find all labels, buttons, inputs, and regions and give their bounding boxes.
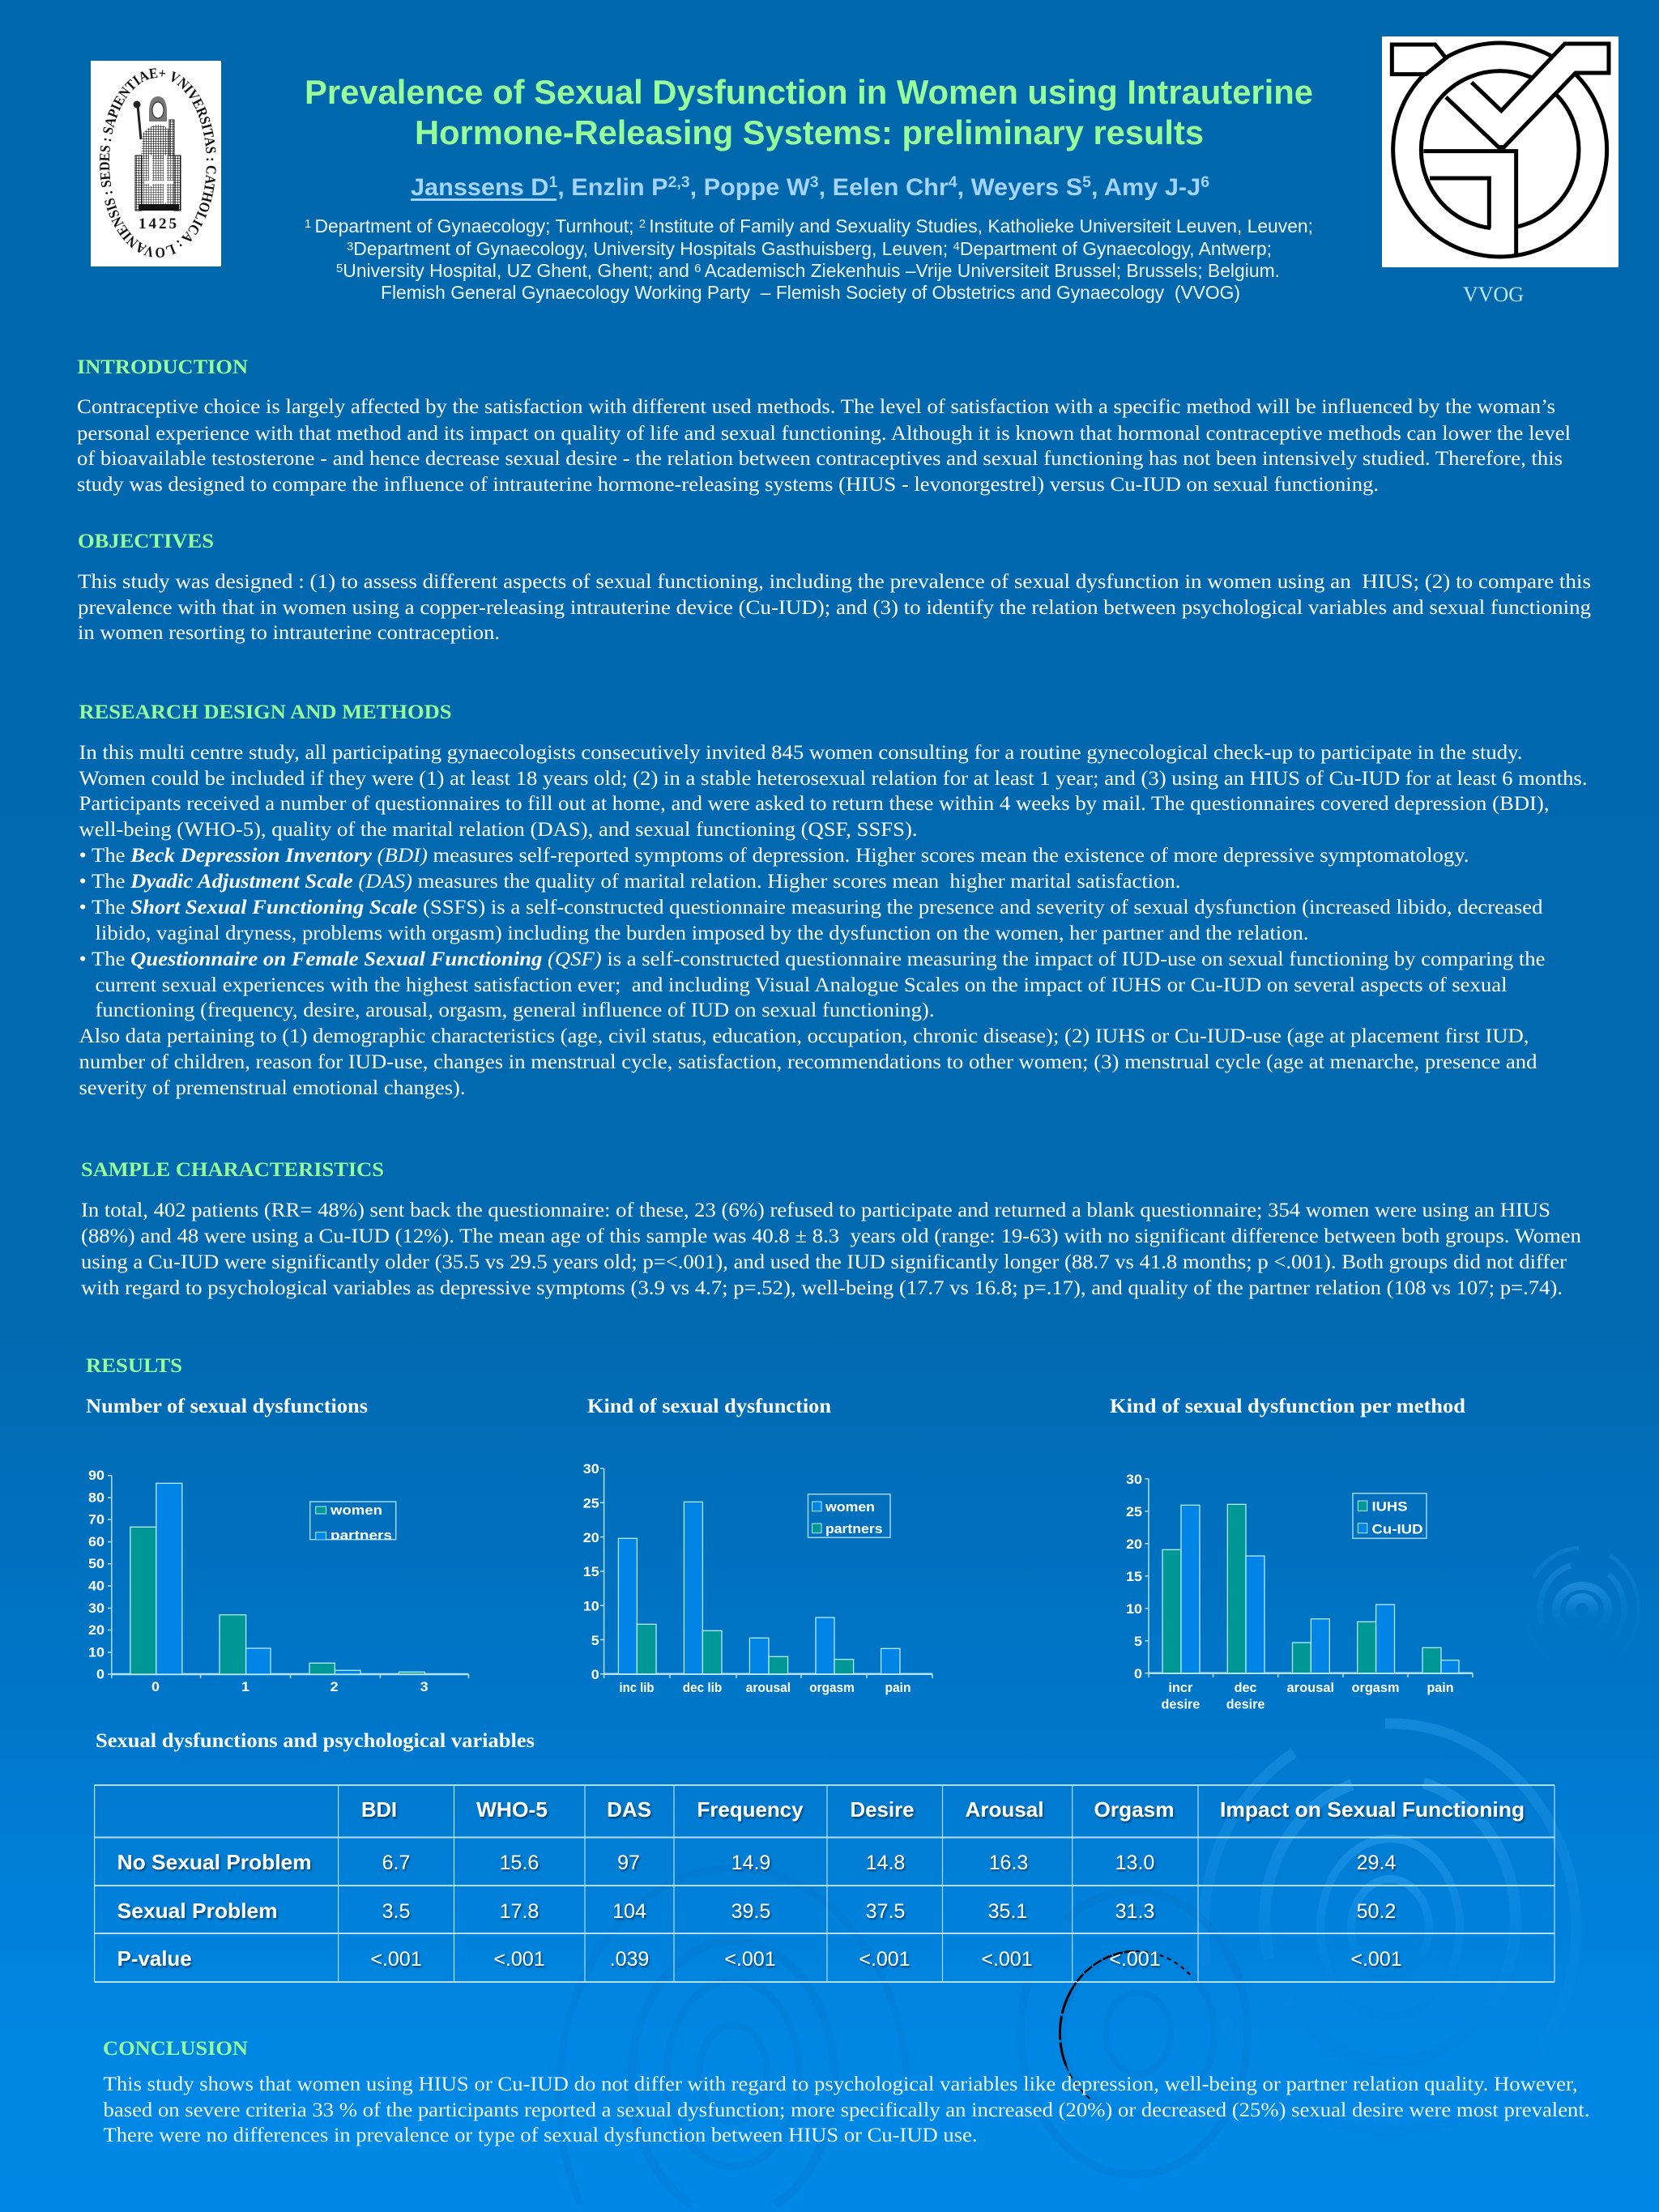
legend: partners: [331, 1528, 392, 1543]
x axis labels: incr: [1168, 1680, 1193, 1695]
y axis labels: 25: [1126, 1504, 1142, 1519]
affiliations: 1: [305, 217, 314, 231]
text block: conclusion: There were no differences in prevalence or type of sexual dysfunction between HIUS or Cu-IUD use.: [104, 2125, 977, 2146]
x axis labels: dec lib: [683, 1680, 722, 1695]
legend: [808, 1494, 890, 1537]
text block: introduction: of bioavailable testosterone - and hence decrease sexual desire - the relation between contraceptives and sexual functioning has not been intensively studied. Therefore, this: [77, 448, 1563, 470]
table row: no sexual problem: 14.9: [731, 1852, 770, 1874]
y axis labels: 20: [583, 1530, 599, 1545]
table header row: BDI: [361, 1797, 397, 1822]
text block: methods: Women could be included if they were (1) at least 18 years old; (2) in a stable heterosexual relation for at least 1 year; and (3) using an HIUS of Cu-IUD for at least 6 months.: [79, 768, 1588, 790]
authors: 6: [1201, 174, 1209, 191]
y axis labels: 10: [1126, 1601, 1142, 1617]
table heading: Sexual dysfunctions and psychological variables: [96, 1730, 535, 1752]
table row: no sexual problem: 6.7: [382, 1852, 410, 1874]
table row: p-value: <.001: [859, 1948, 911, 1971]
table row: sexual problem: 50.2: [1357, 1900, 1396, 1923]
y axis labels: [88, 1468, 104, 1681]
bars: [130, 1483, 424, 1674]
table row: no sexual problem: No Sexual Problem: [117, 1850, 312, 1874]
text block: conclusion: [104, 2073, 1589, 2146]
y axis labels: 30: [1126, 1472, 1142, 1487]
legend: women: [825, 1499, 875, 1515]
y axis labels: 40: [88, 1578, 104, 1594]
legend: partners: [825, 1521, 883, 1536]
y axis labels: 80: [88, 1490, 104, 1505]
table row: p-value: <.001: [493, 1948, 545, 1971]
x axis labels: [1162, 1680, 1453, 1711]
affiliations: 3: [347, 240, 353, 254]
text block: methods: libido, vaginal dryness, problems with orgasm) including the burden imposed by the dysfunction on the women, her partner and the relation.: [96, 923, 1309, 944]
heading: results: RESULTS: [86, 1355, 182, 1377]
table row: sexual problem: 39.5: [731, 1900, 770, 1923]
authors: , Amy J-J: [1091, 174, 1201, 201]
bar chart: number of sexual dysfunctions: [88, 1468, 468, 1694]
x axis labels: orgasm: [809, 1680, 855, 1695]
table row: sexual problem: 35.1: [988, 1900, 1027, 1923]
y axis labels: 0: [96, 1667, 104, 1681]
text block: sample characteristics: using a Cu-IUD were significantly older (35.5 vs 29.5 years old; p=<.001), and used the IUD significantly longer (88.7 vs 41.8 months; p <.001). Both groups did not differ: [81, 1251, 1567, 1273]
table row: sexual problem: Sexual Problem: [117, 1899, 278, 1923]
x axis labels: 2: [331, 1679, 339, 1694]
table row: sexual problem: 17.8: [500, 1900, 539, 1923]
bar chart: kind of sexual dysfunction: [583, 1461, 932, 1695]
title: Prevalence of Sexual Dysfunction in Women using Intrauterine: [305, 73, 1313, 111]
table row: no sexual problem: 29.4: [1357, 1852, 1396, 1874]
y axis labels: 60: [88, 1534, 104, 1549]
authors: , Weyers S: [957, 174, 1082, 201]
text block: methods: Participants received a number of questionnaires to fill out at home, and were asked to return these within 4 weeks by mail. The questionnaires covered depression (BDI),: [79, 793, 1549, 815]
y axis labels: 5: [1134, 1634, 1142, 1649]
table header row: [361, 1797, 1525, 1822]
bars: [618, 1502, 900, 1674]
text block: methods: • The Short Sexual Functioning Scale (SSFS) is a self-constructed questionnaire measuring the presence and severity of sexual dysfunction (increased libido, decreased: [79, 897, 1543, 918]
x axis labels: orgasm: [1351, 1680, 1400, 1695]
text block: objectives: in women resorting to intrauterine contraception.: [78, 622, 500, 644]
text block: methods: [79, 742, 1588, 1099]
bars: [1162, 1504, 1459, 1673]
selection arc artifact: [1060, 1951, 1190, 2100]
text block: methods: well-being (WHO-5), quality of the marital relation (DAS), and sexual functioning (QSF, SSFS).: [79, 819, 917, 841]
table header row: Frequency: [697, 1797, 804, 1822]
table row: sexual problem: 3.5: [382, 1900, 410, 1923]
seal ring inscription: + VNIVERSITAS : CATHOLICA : LOVANIENSIS : SEDES : SAPIENTIAE: [100, 68, 216, 258]
x axis labels: [619, 1680, 911, 1695]
table header row: Impact on Sexual Functioning: [1220, 1797, 1525, 1822]
authors: [411, 174, 1209, 201]
text block: introduction: Contraceptive choice is largely affected by the satisfaction with different used methods. The level of satisfaction with a specific method will be influenced by the woman’s: [77, 396, 1555, 418]
y axis labels: 10: [583, 1599, 599, 1613]
x axis labels: pain: [1427, 1680, 1453, 1695]
y axis labels: [583, 1461, 599, 1682]
table row: sexual problem: 37.5: [866, 1900, 905, 1923]
text block: sample characteristics: [81, 1200, 1582, 1299]
table row: sexual problem: 104: [612, 1900, 646, 1923]
text block: objectives: This study was designed : (1) to assess different aspects of sexual functioning, including the prevalence of sexual dysfunction in women using an HIUS; (2) to compare this: [78, 571, 1591, 593]
seated figure: [133, 96, 181, 211]
text block: introduction: [77, 396, 1571, 496]
logo: VVOG: [1382, 36, 1618, 267]
bar chart: kind of sexual dysfunction per method: [1126, 1472, 1473, 1711]
text block: methods: • The Beck Depression Inventory (BDI) measures self-reported symptoms of depression. Higher scores mean the existence of more depressive symptomatology.: [79, 845, 1469, 867]
table row: no sexual problem: 97: [617, 1852, 640, 1874]
text block: methods: In this multi centre study, all participating gynaecologists consecutively invited 845 women consulting for a routine gynecological check-up to participate in the study.: [79, 742, 1523, 764]
table header row: Orgasm: [1094, 1797, 1175, 1822]
x axis labels: pain: [885, 1680, 911, 1695]
table row: no sexual problem: [117, 1850, 1396, 1874]
table row: no sexual problem: 13.0: [1115, 1852, 1154, 1874]
affiliations: Institute of Family and Sexuality Studies, Katholieke Universiteit Leuven, Leuven;: [649, 215, 1313, 237]
table header row: Arousal: [966, 1797, 1043, 1822]
legend: women: [330, 1502, 382, 1518]
table row: p-value: <.001: [724, 1948, 776, 1971]
year 1425: 1425: [139, 215, 179, 232]
x axis labels: dec: [1235, 1680, 1257, 1695]
text block: methods: • The Dyadic Adjustment Scale (DAS) measures the quality of marital relation. Higher scores mean higher marital satisfaction.: [79, 871, 1181, 893]
table row: sexual problem: [117, 1899, 1396, 1923]
affiliations: Academisch Ziekenhuis –Vrije Universiteit Brussel; Brussels; Belgium.: [705, 260, 1280, 281]
y axis labels: 20: [1126, 1536, 1142, 1552]
table row: no sexual problem: 16.3: [989, 1852, 1028, 1874]
authors: 1: [548, 174, 558, 191]
text block: conclusion: This study shows that women using HIUS or Cu-IUD do not differ with regard to psychological variables like depression, well-being or partner relation quality. However,: [104, 2073, 1578, 2095]
x axis labels: 3: [420, 1679, 429, 1694]
title: [305, 73, 1313, 151]
text block: conclusion: based on severe criteria 33 % of the participants reported a sexual dysfunction; more specifically an increased (20%) or decreased (25%) sexual desire were most prevalent.: [104, 2099, 1589, 2121]
authors: 3: [810, 174, 819, 191]
text block: methods: • The Questionnaire on Female Sexual Functioning (QSF) is a self-constructed questionnaire measuring the impact of IUD-use on sexual functioning by comparing the: [79, 948, 1546, 970]
table text: [117, 1797, 1525, 1971]
table: sexual dysfunctions and psychological variables: [95, 1785, 1555, 2100]
table header row: WHO-5: [476, 1797, 548, 1822]
x axis labels: desire: [1162, 1696, 1200, 1711]
y axis labels: 50: [88, 1556, 104, 1571]
axes: [108, 1476, 468, 1678]
y axis labels: 0: [1134, 1666, 1142, 1681]
affiliations: [305, 215, 1313, 303]
authors: , Poppe W: [690, 174, 810, 201]
axes: [600, 1468, 932, 1678]
y axis labels: 10: [88, 1644, 104, 1660]
table row: p-value: <.001: [370, 1948, 422, 1971]
section: research design and methods: [79, 701, 1588, 1099]
legend: [310, 1502, 396, 1543]
table row: p-value: .039: [610, 1948, 649, 1971]
x axis labels: 1: [241, 1679, 249, 1694]
legend: Cu-IUD: [1372, 1521, 1422, 1536]
chart heading: kind of sexual dysfunction per method: Kind of sexual dysfunction per method: [1110, 1396, 1465, 1417]
title: Hormone-Releasing Systems: preliminary results: [415, 113, 1204, 151]
legend: IUHS: [1372, 1499, 1408, 1515]
table row: p-value: <.001: [1350, 1948, 1402, 1971]
table row: no sexual problem: 15.6: [500, 1852, 539, 1874]
text block: introduction: personal experience with that method and its impact on quality of life and sexual functioning. Although it is known that hormonal contraceptive methods can lower the level: [77, 423, 1571, 445]
table row: sexual problem: 31.3: [1115, 1900, 1154, 1923]
affiliations: Department of Gynaecology, Antwerp;: [960, 238, 1272, 259]
y axis labels: 25: [583, 1495, 599, 1511]
table row: p-value: P-value: [117, 1946, 192, 1971]
text block: objectives: [78, 571, 1592, 644]
table header row: Desire: [851, 1797, 914, 1822]
affiliations: Department of Gynaecology; Turnhout;: [314, 215, 639, 237]
text block: introduction: study was designed to compare the influence of intrauterine hormone-releasing systems (HIUS - levonorgestrel) versus Cu-IUD on sexual functioning.: [77, 474, 1379, 496]
table row: p-value: [117, 1946, 1402, 1971]
y axis labels: 90: [88, 1468, 104, 1483]
text block: sample characteristics: with regard to psychological variables as depressive symptoms (3.9 vs 4.7; p=.52), well-being (17.7 vs 16.8; p=.17), and quality of the partner relation (108 vs 107; p=.74).: [81, 1277, 1563, 1299]
y axis labels: 5: [591, 1633, 599, 1648]
x axis labels: arousal: [746, 1680, 791, 1695]
y axis labels: [1126, 1472, 1142, 1681]
y axis labels: 30: [583, 1461, 599, 1477]
x axis labels: [151, 1679, 429, 1694]
affiliations: 2: [639, 217, 649, 231]
y axis labels: 0: [591, 1667, 599, 1682]
section: sample characteristics: [81, 1159, 1582, 1299]
logo: KU Leuven seal: [91, 61, 221, 266]
authors: 5: [1082, 174, 1091, 191]
table row: p-value: <.001: [1109, 1948, 1161, 1971]
x axis labels: desire: [1226, 1696, 1265, 1711]
y axis labels: 70: [88, 1511, 104, 1528]
logo caption: VVOG: [1463, 283, 1524, 306]
table row: no sexual problem: 14.8: [866, 1852, 905, 1874]
table header row: DAS: [607, 1797, 651, 1822]
chart heading: number of sexual dysfunctions: Number of sexual dysfunctions: [86, 1396, 368, 1417]
text block: objectives: prevalence with that in women using a copper-releasing intrauterine device (Cu-IUD); and (3) to identify the relation between psychological variables and sexual functioning: [78, 597, 1592, 619]
y axis labels: 30: [88, 1600, 104, 1616]
authors: 2,3: [668, 174, 690, 191]
background ripple patterns: [559, 1548, 1639, 2205]
affiliations: 4: [953, 240, 960, 254]
affiliations: Flemish General Gynaecology Working Party – Flemish Society of Obstetrics and Gynaecology (VVOG): [381, 282, 1240, 303]
authors: , Eelen Chr: [819, 174, 949, 201]
text block: methods: severity of premenstrual emotional changes).: [79, 1077, 465, 1099]
heading: introduction: INTRODUCTION: [77, 356, 248, 378]
authors: Janssens D: [411, 174, 546, 201]
affiliations: 5: [336, 262, 343, 275]
heading: sample characteristics: SAMPLE CHARACTERISTICS: [81, 1159, 384, 1181]
section: objectives: [78, 531, 1592, 644]
authors: 4: [949, 174, 957, 191]
text block: methods: functioning (frequency, desire, arousal, orgasm, general influence of IUD on sexual functioning).: [96, 999, 935, 1021]
axes: [1145, 1479, 1473, 1677]
section: conclusion: [103, 2038, 1589, 2146]
x axis labels: 0: [151, 1679, 160, 1694]
section: introduction: [77, 356, 1571, 496]
x axis labels: arousal: [1286, 1680, 1334, 1695]
heading: research design and methods: RESEARCH DESIGN AND METHODS: [79, 701, 452, 723]
legend: [1353, 1494, 1427, 1538]
text block: methods: current sexual experiences with the highest satisfaction ever; and including Visual Analogue Scales on the impact of IUHS or Cu-IUD on several aspects of sexual: [96, 974, 1508, 996]
table row: p-value: <.001: [981, 1948, 1033, 1971]
text block: sample characteristics: (88%) and 48 were using a Cu-IUD (12%). The mean age of this sample was 40.8 ± 8.3 years old (range: 19-63) with no significant difference between both groups. Women: [81, 1225, 1582, 1247]
chart heading: kind of sexual dysfunction: Kind of sexual dysfunction: [587, 1396, 831, 1417]
heading: objectives: OBJECTIVES: [78, 531, 214, 552]
affiliations: University Hospital, UZ Ghent, Ghent; and: [343, 260, 694, 281]
y axis labels: 20: [88, 1622, 104, 1638]
y axis labels: 15: [1126, 1569, 1142, 1584]
table grid: [95, 1785, 1555, 1982]
text block: sample characteristics: In total, 402 patients (RR= 48%) sent back the questionnaire: of these, 23 (6%) refused to participate and returned a blank questionnaire; 354 women were using an HIUS: [81, 1200, 1550, 1221]
text block: methods: Also data pertaining to (1) demographic characteristics (age, civil status, education, occupation, chronic disease); (2) IUHS or Cu-IUD-use (age at placement first IUD,: [79, 1025, 1529, 1047]
text block: methods: number of children, reason for IUD-use, changes in menstrual cycle, satisfaction, recommendations to other women; (3) menstrual cycle (age at menarche, presence and: [79, 1051, 1537, 1073]
y axis labels: 15: [583, 1564, 599, 1579]
authors: , Enzlin P: [557, 174, 668, 201]
x axis labels: inc lib: [619, 1680, 655, 1695]
affiliations: 6: [694, 262, 705, 275]
affiliations: Department of Gynaecology, University Hospitals Gasthuisberg, Leuven;: [353, 238, 953, 259]
heading: conclusion: CONCLUSION: [103, 2038, 248, 2060]
